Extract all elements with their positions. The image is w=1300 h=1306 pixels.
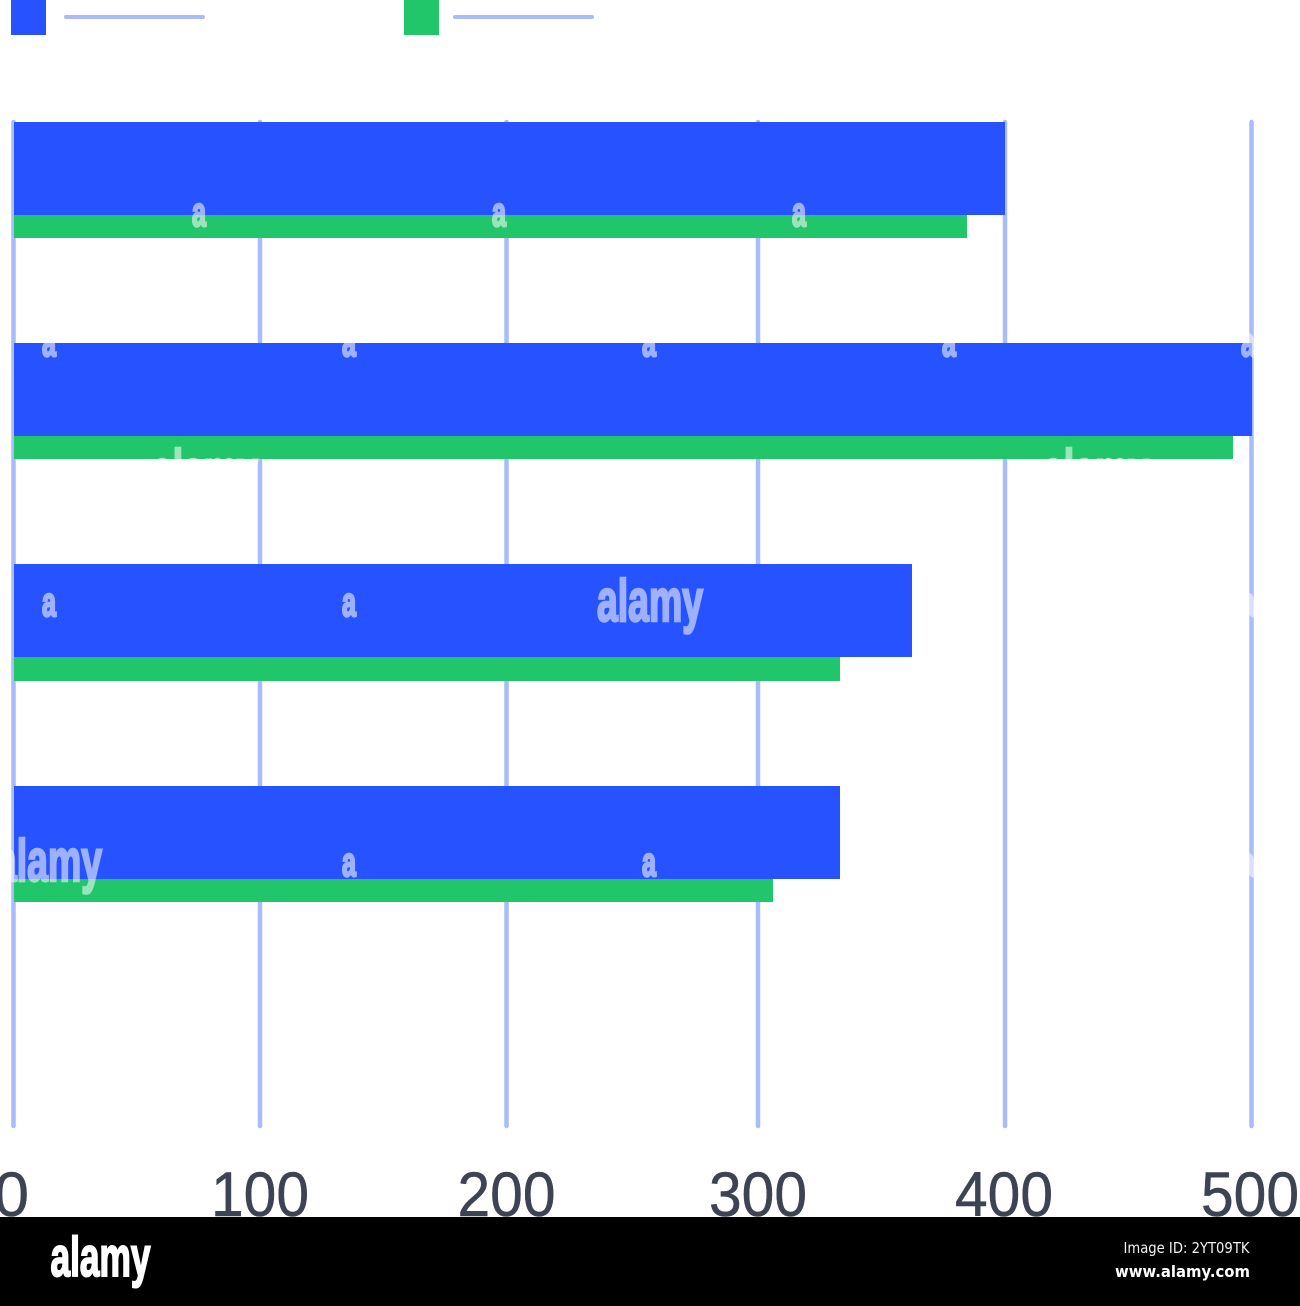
watermark text on bars: a xyxy=(942,319,957,365)
watermark text on bars: alamy xyxy=(152,438,258,504)
footer url: www.alamy.com xyxy=(1115,1262,1250,1281)
x-axis labels: 400 xyxy=(955,1160,1053,1230)
watermark text on bars: a xyxy=(342,579,357,625)
footer image id: Image ID: 2YT09TK xyxy=(1124,1239,1251,1257)
watermark text on bars: alamy xyxy=(0,828,102,894)
watermark text on bars: a xyxy=(342,839,357,885)
bars group 4 xyxy=(14,786,840,902)
x-axis labels: 200 xyxy=(458,1160,556,1230)
watermark text on bars: a xyxy=(642,839,657,885)
watermark text on bars: a xyxy=(342,319,357,365)
watermark text on bars: a xyxy=(1241,319,1256,365)
grid lines xyxy=(14,122,1252,1126)
x-axis labels: 100 xyxy=(211,1160,309,1230)
footer logo: alamy xyxy=(50,1225,150,1288)
legend item: green series xyxy=(404,0,594,35)
x-axis labels: 300 xyxy=(709,1160,807,1230)
watermark text on bars: a xyxy=(792,189,807,235)
legend xyxy=(11,0,594,35)
watermark text on bars: alamy xyxy=(597,568,703,634)
watermark text on bars: alamy xyxy=(1043,438,1149,504)
watermark text on bars: a xyxy=(1241,579,1256,625)
footer bar xyxy=(0,1217,1300,1306)
bars group 2 xyxy=(14,343,1252,459)
watermark text on bars: a xyxy=(42,579,57,625)
legend item: blue series xyxy=(11,0,205,35)
watermark text on bars xyxy=(0,189,1256,894)
watermark text on bars: a xyxy=(492,189,507,235)
watermark text on bars: a xyxy=(192,189,207,235)
x-axis labels xyxy=(0,1160,1299,1230)
watermark text on bars: a xyxy=(1241,839,1256,885)
watermark text on bars: a xyxy=(642,319,657,365)
bars group 1 xyxy=(14,122,1005,238)
watermark text on bars: a xyxy=(42,319,57,365)
bars group 3 xyxy=(14,564,912,681)
